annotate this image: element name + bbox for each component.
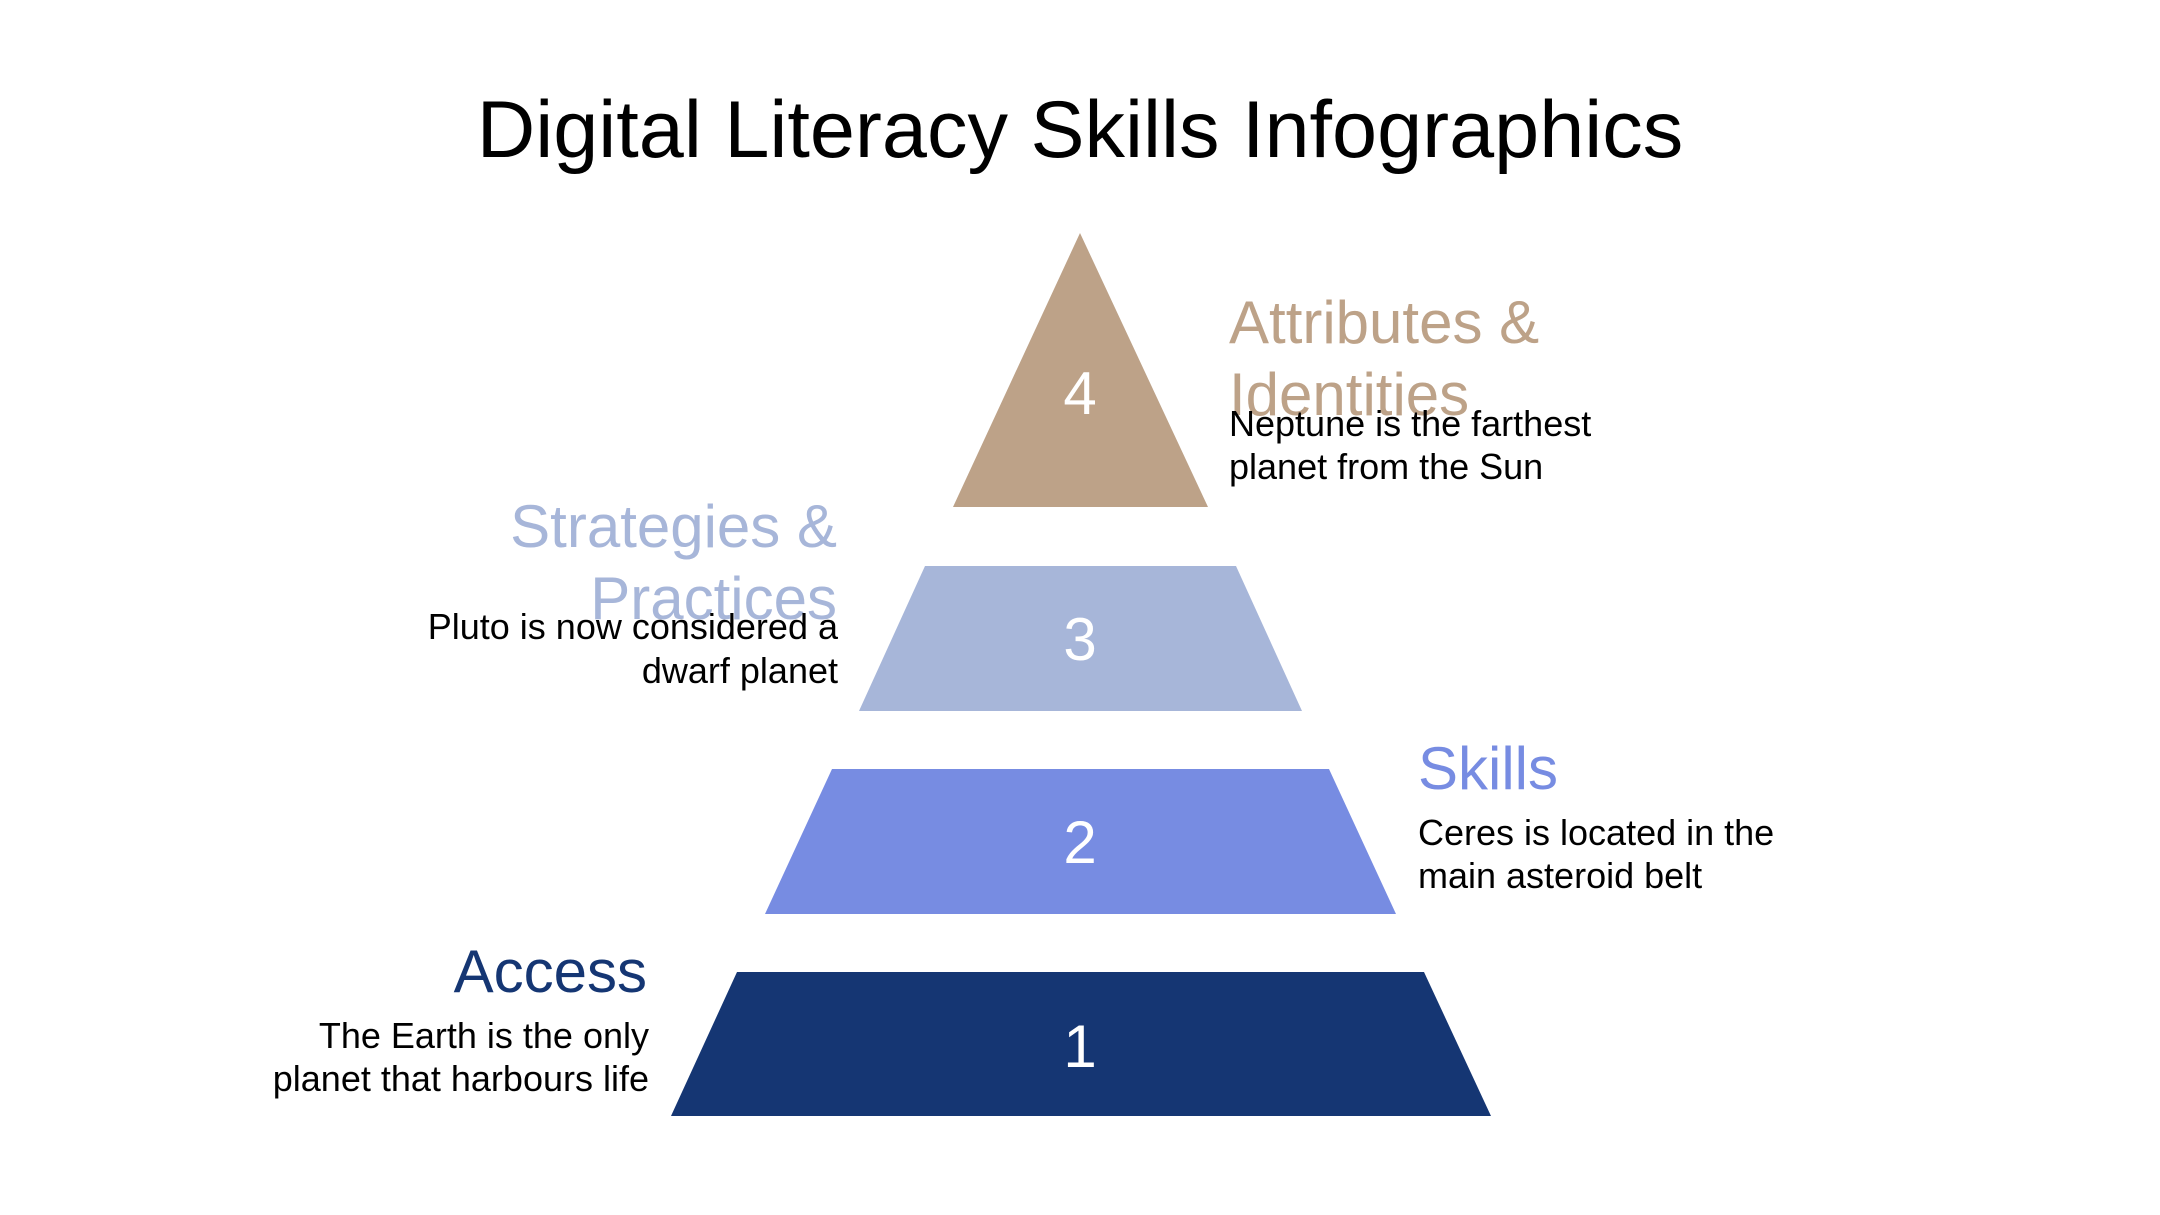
label: Access: Access — [454, 938, 647, 1005]
pyramid tier 2: trapezoid: 2 — [1063, 809, 1097, 876]
label: Strategies & Practices: Strategies & — [510, 493, 837, 560]
label: Skills — [1418, 735, 1774, 896]
label: Attributes & Identities — [1229, 289, 1591, 487]
label: Strategies & Practices: dwarf planet — [642, 650, 838, 691]
label: Access — [273, 938, 649, 1099]
label: Access: planet that harbours life — [273, 1058, 649, 1099]
pyramid tier 4: triangle: 4 — [1063, 360, 1097, 427]
label: Attributes & Identities: planet from the Sun — [1229, 446, 1543, 487]
label: Attributes & Identities: Neptune is the farthest — [1229, 403, 1591, 444]
label: Attributes & Identities: Attributes & — [1229, 289, 1539, 356]
label: Attributes & Identities: Identities — [1229, 361, 1469, 428]
pyramid tier 1: trapezoid — [671, 972, 1491, 1116]
label: Strategies & Practices: Practices — [590, 565, 837, 632]
pyramid tier 3: trapezoid: 3 — [1063, 606, 1097, 673]
pyramid tier 3: trapezoid — [859, 566, 1302, 711]
title: Digital Literacy Skills Infographics — [477, 85, 1683, 175]
pyramid tier 2: trapezoid — [765, 769, 1396, 914]
pyramid tier 4: triangle — [953, 233, 1208, 507]
pyramid tier 1: trapezoid: 1 — [1063, 1013, 1097, 1080]
label: Skills: Skills — [1418, 735, 1558, 802]
label: Skills: main asteroid belt — [1418, 855, 1702, 896]
label: Skills: Ceres is located in the — [1418, 812, 1774, 853]
label: Strategies & Practices: Pluto is now considered a — [428, 606, 839, 647]
label: Access: The Earth is the only — [319, 1015, 649, 1056]
label: Strategies & Practices — [428, 493, 839, 691]
